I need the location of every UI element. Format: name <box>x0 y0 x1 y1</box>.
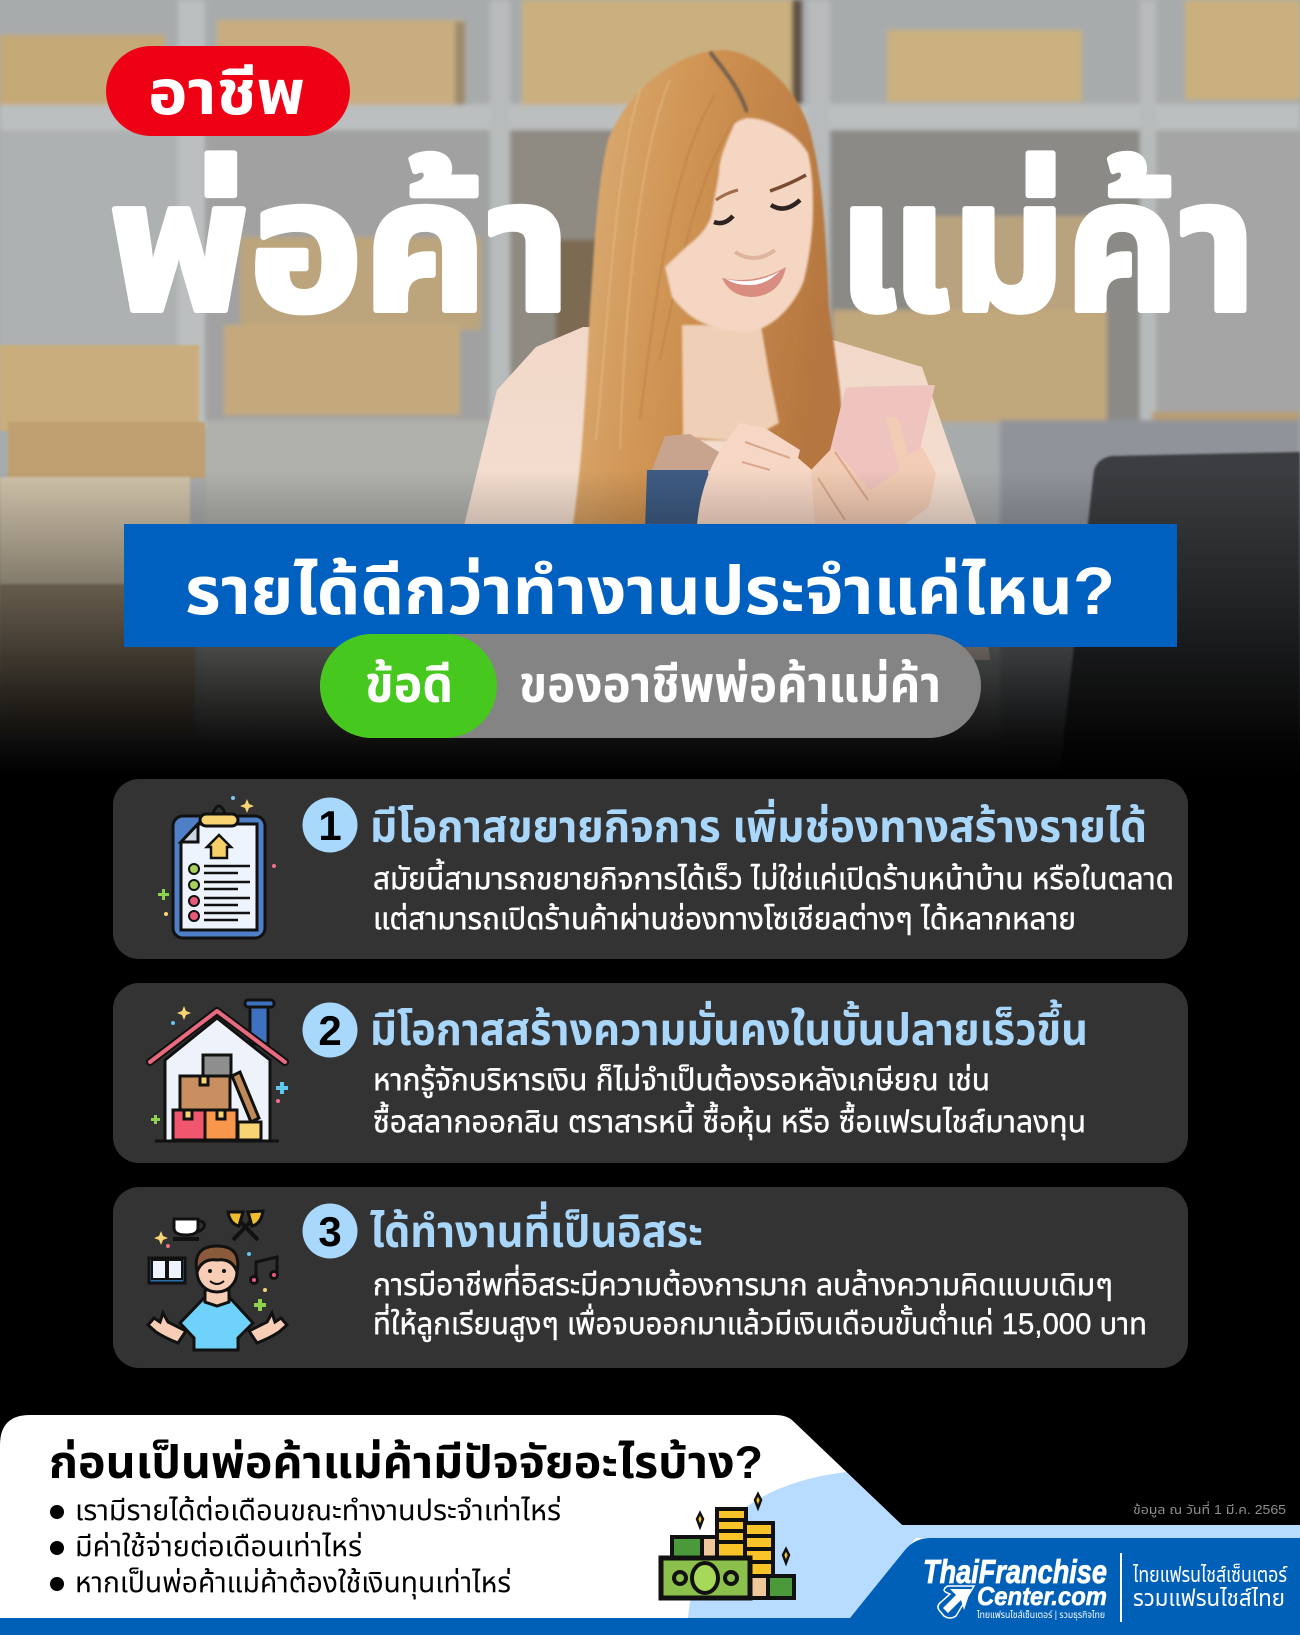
light blue wave <box>688 1472 1300 1618</box>
panel: advantage 2 <box>113 983 1188 1163</box>
bullet list <box>50 1495 561 1599</box>
smile <box>722 267 786 297</box>
collar <box>652 434 735 472</box>
number 2 <box>302 1002 358 1058</box>
hair <box>572 50 846 530</box>
panel: advantage 3 <box>113 1187 1188 1368</box>
body text 3: ที่ให้ลูกเรียนสูงๆ เพื่อจบออกมาแล้วมีเงินเดือนขั้นต่ำแค่ 15,000 บาท <box>373 1303 1147 1342</box>
title: พ่อค้า แม่ค้า <box>109 143 1256 349</box>
pill: advantages <box>320 634 981 738</box>
body text 1: สมัยนี้สามารถขยายกิจการได้เร็ว ไม่ใช่แค่เปิดร้านหน้าบ้าน หรือในตลาด <box>373 858 1174 896</box>
logo arrow <box>938 1586 974 1618</box>
logo: ThaiFranchise Center.com <box>923 1553 1288 1622</box>
footer panel: factors before starting <box>0 1415 1300 1635</box>
shirt <box>463 327 990 660</box>
number 3: 3 <box>318 1208 342 1255</box>
body text 3: การมีอาชีพที่อิสระมีความต้องการมาก ลบล้างความคิดแบบเดิมๆ <box>373 1264 1113 1302</box>
hands <box>697 417 936 525</box>
eyes, brows, nose <box>714 175 806 258</box>
body text 1 <box>373 858 1174 936</box>
face <box>665 118 813 332</box>
logo: ThaiFranchise Center.com: Center.com <box>977 1581 1107 1611</box>
number 1: 1 <box>318 802 342 849</box>
background photo: shelves and boxes <box>0 0 1300 780</box>
icon: free person with hobbies <box>148 1211 287 1350</box>
number 1 <box>302 798 358 852</box>
icon: money and coins <box>661 1494 794 1598</box>
overalls <box>645 470 712 530</box>
footer heading: ก่อนเป็นพ่อค้าแม่ค้ามีปัจจัยอะไรบ้าง? <box>49 1437 763 1488</box>
banner: income question <box>124 524 1177 647</box>
title: พ่อค้า แม่ค้า: พ่อค้า <box>109 143 571 349</box>
blue base and logo block <box>0 1538 1300 1635</box>
laptop <box>1060 452 1300 770</box>
panel: advantage 1 <box>113 779 1188 959</box>
heading 1: มีโอกาสขยายกิจการ เพิ่มช่องทางสร้างรายได้ <box>370 799 1147 852</box>
logo: ThaiFranchise Center.com: ไทยแฟรนไชส์เซ็นเตอร์ | รวมธุรกิจไทย <box>976 1608 1105 1621</box>
title: พ่อค้า แม่ค้า: แม่ค้า <box>838 143 1256 349</box>
left box stack <box>0 345 205 734</box>
banner: income question: รายได้ดีกว่าทำงานประจำแค่ไหน? <box>185 554 1115 629</box>
source note: ข้อมูล ณ วันที่ 1 มี.ค. 2565 <box>1133 1501 1286 1517</box>
number 2: 2 <box>318 1007 342 1054</box>
icon: house with boxes <box>150 1000 288 1141</box>
number 3 <box>302 1204 358 1258</box>
badge: อาชีพ <box>106 46 350 136</box>
chest <box>682 325 779 442</box>
body text 2 <box>373 1064 1086 1140</box>
logo: ThaiFranchise Center.com: ThaiFranchise <box>923 1553 1107 1590</box>
heading 3: ได้ทำงานที่เป็นอิสระ <box>370 1201 703 1257</box>
phone <box>826 385 935 520</box>
hair part and strands <box>596 52 825 450</box>
body text 1: แต่สามารถเปิดร้านค้าผ่านช่องทางโซเชียลต่างๆ ได้หลากหลาย <box>373 903 1076 936</box>
logo: ThaiFranchise Center.com: รวมแฟรนไชส์ไทย <box>1133 1585 1285 1611</box>
badge: อาชีพ: อาชีพ <box>148 59 305 128</box>
heading 2: มีโอกาสสร้างความมั่นคงในบั้นปลายเร็วขึ้น <box>370 999 1088 1055</box>
bottom fade to black <box>0 470 1300 814</box>
bullet list: เรามีรายได้ต่อเดือนขณะทำงานประจำเท่าไหร่ <box>75 1495 561 1527</box>
pill: advantages: ข้อดี <box>365 656 453 713</box>
icon: clipboard <box>158 796 276 938</box>
pill: advantages: ของอาชีพพ่อค้าแม่ค้า <box>519 656 941 713</box>
body text 3 <box>373 1264 1147 1342</box>
bullet list: มีค่าใช้จ่ายต่อเดือนเท่าไหร่ <box>75 1531 362 1563</box>
photo: woman with phone <box>463 50 990 660</box>
bullet list: หากเป็นพ่อค้าแม่ค้าต้องใช้เงินทุนเท่าไหร่ <box>75 1567 511 1599</box>
body text 2: หากรู้จักบริหารเงิน ก็ไม่จำเป็นต้องรอหลังเกษียณ เช่น <box>373 1064 990 1098</box>
body text 2: ซื้อสลากออกสิน ตราสารหนี้ ซื้อหุ้น หรือ ซื้อแฟรนไชส์มาลงทุน <box>373 1101 1086 1140</box>
